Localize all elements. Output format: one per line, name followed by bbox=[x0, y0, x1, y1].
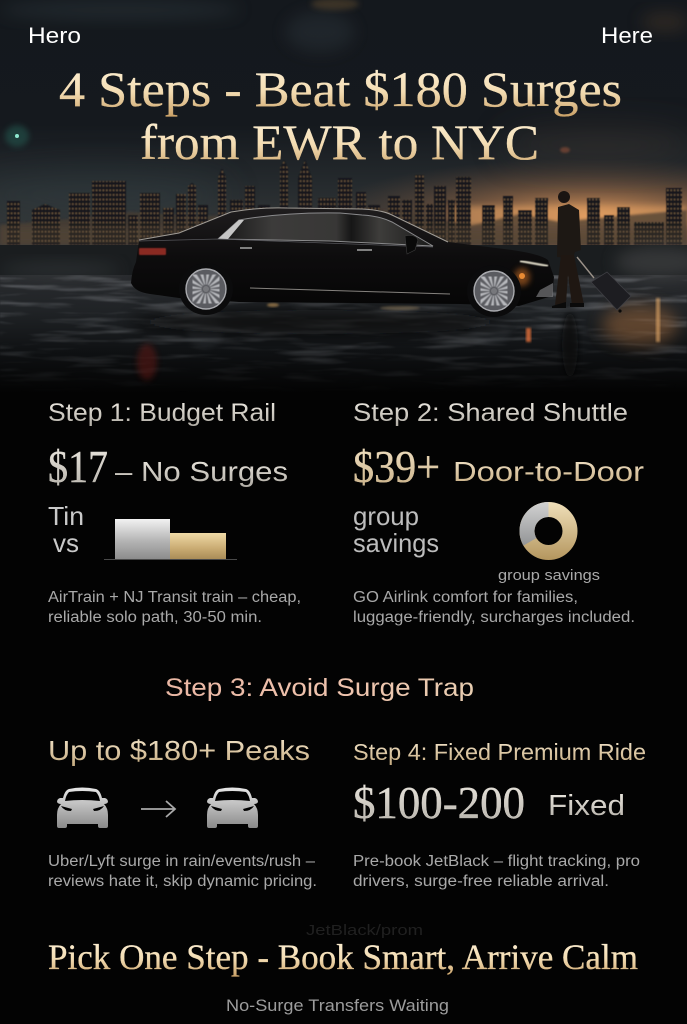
heading: step 1: Step 1: Budget Rail bbox=[48, 399, 276, 427]
arrow bbox=[141, 801, 175, 817]
hero image: night skyline, limousine and traveller bbox=[0, 0, 687, 393]
description: go airlink: luggage-friendly, surcharges included. bbox=[353, 609, 635, 626]
description: airtrain bbox=[48, 589, 301, 626]
price: $39+ door-to-door bbox=[353, 442, 644, 492]
rear wheel bbox=[179, 263, 233, 315]
icon: car left bbox=[57, 788, 108, 828]
price: $17 no surges: – No Surges bbox=[115, 456, 288, 487]
heading: step 2: Step 2: Shared Shuttle bbox=[353, 399, 628, 427]
label: group savings: group bbox=[353, 501, 419, 531]
label: Here: Here bbox=[601, 23, 653, 48]
description: jetblack: drivers, surge-free reliable arrival. bbox=[353, 873, 609, 890]
label: Hero: Hero bbox=[28, 23, 81, 48]
label: tin vs bbox=[48, 501, 84, 558]
icon: car right bbox=[207, 788, 258, 828]
panel: step 4 fixed premium ride bbox=[353, 739, 646, 890]
description: uber lyft bbox=[48, 853, 317, 890]
title bbox=[59, 61, 622, 170]
panel: step 3 surge trap bbox=[48, 735, 317, 890]
donut chart bbox=[527, 510, 570, 552]
faint watermark text: JetBlack/prom bbox=[306, 922, 423, 939]
panel: step 1 budget rail bbox=[48, 399, 301, 626]
header labels bbox=[28, 23, 653, 48]
description: airtrain: AirTrain + NJ Transit train – cheap, bbox=[48, 589, 301, 606]
price: $39+ door-to-door: $39+ bbox=[353, 442, 440, 492]
harbour wall bbox=[0, 245, 687, 276]
label: tin vs: vs bbox=[53, 528, 79, 558]
description: jetblack: Pre-book JetBlack – flight tracking, pro bbox=[353, 853, 640, 870]
title: from EWR to NYC bbox=[140, 114, 539, 170]
call to action heading: Pick One Step - Book Smart, Arrive Calm bbox=[48, 937, 638, 977]
label: group savings: savings bbox=[353, 528, 439, 558]
wet ground bbox=[0, 275, 687, 393]
bar chart: silver vs gold bbox=[104, 519, 237, 560]
front wheel bbox=[467, 265, 521, 317]
description: uber lyft: Uber/Lyft surge in rain/events/rush – bbox=[48, 853, 315, 870]
label: group savings bbox=[353, 501, 439, 558]
donut caption: group savings bbox=[498, 567, 600, 584]
price: $17 no surges bbox=[48, 442, 288, 492]
wet patches bbox=[0, 275, 687, 378]
heading: step 3: Step 3: Avoid Surge Trap bbox=[165, 674, 474, 702]
side windows bbox=[218, 213, 433, 246]
heading: step 4: Step 4: Fixed Premium Ride bbox=[353, 739, 646, 765]
label: tin vs: Tin bbox=[48, 501, 84, 531]
description: uber lyft: reviews hate it, skip dynamic pricing. bbox=[48, 873, 317, 890]
price: up to $180+ peaks: Up to $180+ Peaks bbox=[48, 735, 310, 766]
description: go airlink bbox=[353, 589, 635, 626]
title: 4 Steps - Beat $180 Surges bbox=[59, 61, 622, 117]
traveller with suitcase bbox=[552, 191, 631, 313]
limousine bbox=[131, 208, 554, 317]
city skyline bbox=[0, 160, 687, 246]
panel: step 2 shared shuttle bbox=[353, 399, 644, 626]
description: airtrain: reliable solo path, 30-50 min. bbox=[48, 609, 262, 626]
price: $100-200 fixed bbox=[353, 778, 625, 828]
price: $100-200 fixed: Fixed bbox=[548, 790, 625, 822]
price: $17 no surges: $17 bbox=[48, 442, 108, 492]
fog and reflections bbox=[0, 246, 687, 380]
sky bbox=[0, 0, 687, 274]
price: $39+ door-to-door: Door-to-Door bbox=[453, 456, 644, 487]
price: $100-200 fixed: $100-200 bbox=[353, 778, 525, 828]
description: go airlink: GO Airlink comfort for families, bbox=[353, 589, 578, 606]
footer caption: No-Surge Transfers Waiting bbox=[226, 997, 449, 1015]
description: jetblack bbox=[353, 853, 640, 890]
